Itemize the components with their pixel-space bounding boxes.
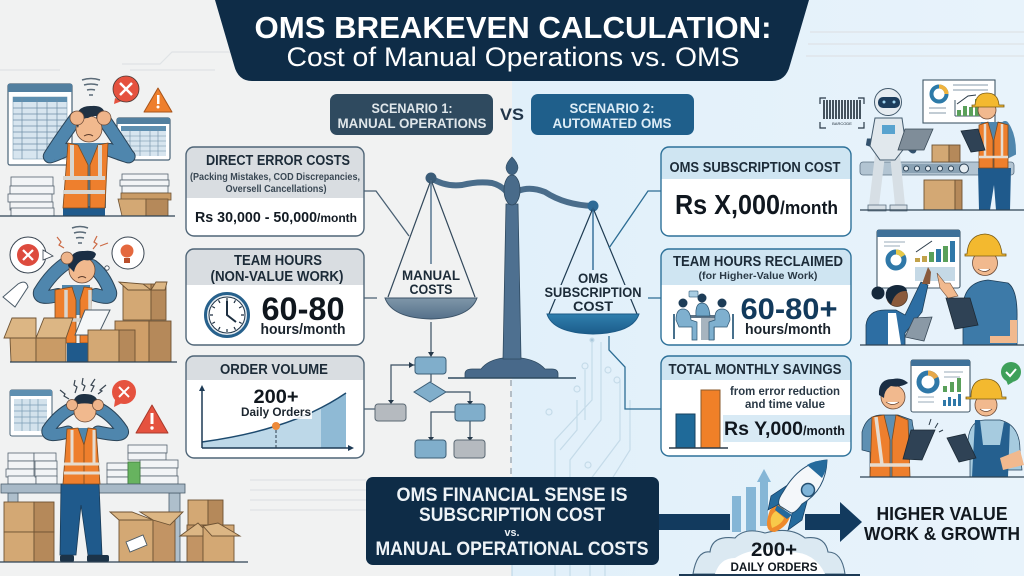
panel: team hours non-value: hours/month	[260, 321, 346, 338]
left pan: COSTS	[410, 282, 452, 297]
cardboard boxes	[924, 145, 962, 210]
panel: team hours reclaimed: TEAM HOURS RECLAIMED	[673, 254, 843, 270]
panel: team hours non-value	[186, 249, 364, 345]
scenario 2 label: SCENARIO 2:	[570, 100, 654, 116]
panel: direct error costs: Oversell Cancellations)	[226, 184, 326, 195]
flowchart	[375, 322, 485, 458]
icon: team meeting	[674, 291, 733, 340]
panel: direct error costs: Rs 30,000 - 50,000	[195, 209, 317, 226]
area chart	[199, 385, 354, 451]
panel: total monthly savings	[661, 356, 851, 456]
floor line	[10, 361, 177, 363]
vs label: VS	[500, 105, 524, 124]
right pan: COST	[573, 299, 614, 314]
callout: OMS financial sense: SUBSCRIPTION COST	[419, 504, 605, 526]
icon: barcode: BARCODE	[832, 121, 852, 126]
left pan	[385, 180, 477, 319]
cardboard boxes	[4, 282, 171, 362]
spreadsheets	[8, 84, 170, 165]
panel: team hours reclaimed	[661, 249, 851, 345]
conveyor belt	[860, 162, 1014, 175]
left pan: MANUAL	[402, 268, 460, 283]
icon: stress marks	[60, 378, 106, 399]
panel: OMS subscription cost: Rs X,000	[675, 189, 780, 220]
panel: total monthly savings: TOTAL MONTHLY SAVINGS	[668, 362, 842, 378]
panel: direct error costs: (Packing Mistakes, COD Discrepancies,	[190, 172, 360, 183]
icon: error bubble	[113, 76, 139, 104]
monitor dashboard	[911, 360, 970, 412]
panel: team hours non-value: TEAM HOURS	[234, 253, 322, 269]
arrow to higher value	[659, 502, 862, 542]
man in vest	[862, 378, 943, 477]
rocket	[767, 460, 827, 532]
panel: OMS subscription cost	[661, 147, 851, 236]
panel: total monthly savings: /month	[803, 423, 845, 438]
illustration: happy team with dashboard	[862, 360, 1024, 477]
cloud	[679, 530, 860, 575]
title banner: OMS BREAKEVEN CALCULATION:	[254, 10, 772, 45]
right pan: SUBSCRIPTION	[544, 285, 642, 300]
panel: total monthly savings: and time value	[745, 399, 825, 411]
panel: total monthly savings: from error reduction	[730, 386, 840, 398]
title banner	[215, 0, 809, 81]
woman	[866, 267, 932, 345]
paper stacks and box	[8, 174, 171, 216]
man with hard hat	[937, 234, 1017, 345]
cardboard boxes	[4, 500, 240, 562]
scale base	[465, 358, 558, 378]
callout: OMS financial sense: vs.	[504, 527, 520, 539]
panel: team hours non-value: (NON-VALUE WORK)	[210, 269, 344, 285]
icon: error bubble	[112, 380, 136, 407]
person	[50, 106, 129, 216]
floor line	[860, 209, 1024, 211]
illustration: stressed worker at paperwork table	[1, 378, 240, 562]
connector lines: OMS panels to scale	[609, 191, 661, 409]
panel: total monthly savings: Rs Y,000	[724, 419, 803, 440]
right pan: OMS	[578, 271, 608, 286]
icon: swirl	[72, 226, 88, 243]
person	[48, 394, 123, 562]
connector lines: manual panels to scale	[364, 191, 409, 409]
panel: team hours non-value: 60-80	[262, 291, 344, 327]
illustration: colleagues reviewing dashboard	[866, 230, 1017, 345]
icon: barcode	[820, 98, 864, 128]
person	[40, 251, 110, 362]
panel: direct error costs	[186, 147, 364, 236]
floor line	[0, 561, 248, 563]
table	[1, 484, 185, 562]
area chart: Daily Orders	[241, 405, 311, 419]
monitor dashboard	[877, 230, 960, 288]
panel: OMS subscription cost: OMS SUBSCRIPTION COST	[670, 160, 841, 176]
panel: team hours reclaimed: (for Higher-Value Work)	[698, 270, 818, 282]
scenario 2 label	[531, 94, 694, 135]
scenario 2 label: AUTOMATED OMS	[552, 115, 672, 131]
paper stacks	[6, 445, 178, 484]
floor line	[0, 215, 175, 217]
illustration: stressed worker with boxes	[3, 226, 171, 362]
bar chart: savings	[669, 390, 728, 448]
panel: team hours reclaimed: 60-80+	[740, 293, 838, 326]
panel: team hours reclaimed: hours/month	[745, 321, 831, 338]
icon: tag	[3, 282, 28, 307]
higher value text	[864, 503, 1020, 544]
monitor dashboard	[923, 80, 995, 123]
scenario 1 label: SCENARIO 1:	[372, 100, 452, 116]
floor line	[860, 476, 1024, 478]
scale post	[503, 204, 521, 359]
scenario 1 label	[330, 94, 493, 135]
title banner: Cost of Manual Operations vs. OMS	[286, 42, 740, 72]
callout: OMS financial sense: MANUAL OPERATIONAL COSTS	[376, 538, 648, 560]
spreadsheet	[10, 390, 52, 436]
rocket label: 200+ daily orders	[730, 540, 818, 574]
icon: warning triangle	[136, 405, 168, 433]
worker in overalls	[947, 379, 1024, 477]
illustration: robot and worker at conveyor	[820, 80, 1014, 211]
balance scale	[385, 157, 642, 378]
area chart: 200+	[254, 387, 298, 408]
floor line	[860, 344, 1024, 346]
illustration: stressed worker with spreadsheets	[8, 76, 172, 216]
icon: green check	[1001, 362, 1021, 385]
panel: order volume	[186, 356, 364, 458]
panel: direct error costs: DIRECT ERROR COSTS	[206, 153, 350, 169]
scale beam	[431, 178, 593, 206]
scenario 1 label: MANUAL OPERATIONS	[338, 115, 486, 131]
higher value text: HIGHER VALUE	[876, 503, 1008, 524]
growth bars	[732, 469, 771, 532]
callout: OMS financial sense: OMS FINANCIAL SENSE IS	[396, 484, 628, 506]
rocket label: 200+ daily orders: 200+	[751, 540, 797, 561]
rocket label: 200+ daily orders: DAILY ORDERS	[730, 560, 818, 574]
worker	[961, 93, 1012, 210]
robot	[867, 88, 933, 211]
icon: idea bubble	[105, 237, 144, 270]
icon: clock	[206, 294, 248, 336]
icon: error speech bubble	[10, 237, 53, 273]
panel: order volume: ORDER VOLUME	[220, 362, 328, 378]
panel: direct error costs: /month	[317, 211, 357, 225]
icon: warning triangle	[144, 88, 172, 112]
right pan	[544, 208, 642, 334]
icon: swirl	[82, 78, 100, 95]
panel: OMS subscription cost: /month	[780, 198, 838, 218]
callout: OMS financial sense	[366, 477, 659, 565]
